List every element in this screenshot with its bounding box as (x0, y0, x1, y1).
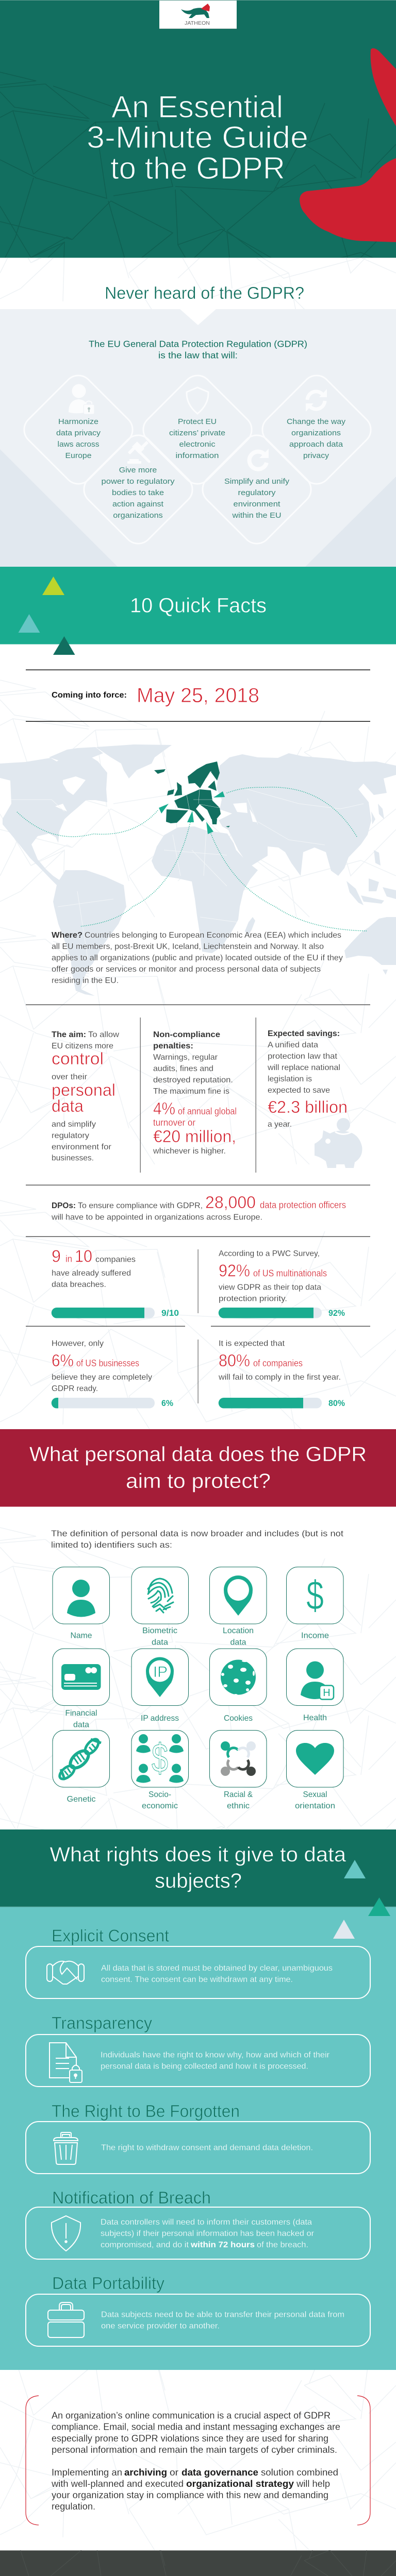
column: the aim: control (52, 1049, 104, 1068)
callout: compliance note: personal information and remain the main targets of cyber criminals. (52, 2445, 337, 2455)
bar (219, 1398, 345, 1409)
stat: 92 percent: According to a PWC Survey, (219, 1249, 320, 1258)
bar: 80% (328, 1398, 345, 1408)
diamond: harmonize: Harmonize (58, 417, 98, 426)
callout: compliance note: solution combined (261, 2467, 338, 2478)
diamond: protect: Protect EU (178, 417, 217, 426)
column: non-compliance penalties: €20 million, (153, 1127, 236, 1146)
text: where: Where? (52, 931, 82, 940)
stat: 92 percent (219, 1249, 345, 1318)
panel: what is the GDPR (0, 309, 396, 567)
callout: compliance note: your organization stay in compliance with this new and demanding (52, 2490, 328, 2500)
diamond: simplify: regulatory (238, 488, 276, 497)
right: explicit consent: Explicit Consent (52, 1926, 169, 1945)
column: expected savings (267, 1029, 348, 1129)
title: to the GDPR (110, 151, 285, 185)
stat: 6 percent: of US businesses (76, 1358, 139, 1368)
callout: compliance note: archiving (124, 2467, 167, 2478)
column: expected savings: legislation is (268, 1075, 312, 1083)
card: location data: Location (223, 1626, 254, 1635)
card: location data (209, 1567, 267, 1647)
banner: rights heading: subjects? (155, 1870, 242, 1892)
column: expected savings: €2.3 billion (268, 1097, 348, 1116)
bar: 92% (328, 1308, 345, 1318)
panel: rights (0, 1829, 396, 2370)
right: notification of breach: Notification of Breach (52, 2188, 211, 2207)
right: explicit consent: All data that is stored must be obtained by clear, unambiguous (101, 1964, 333, 1973)
callout: compliance note: especially prone to GDPR violations since they are used for sharing (52, 2433, 328, 2444)
card: location data: data (230, 1638, 246, 1647)
banner: rights heading: What rights does it give to data (50, 1843, 346, 1866)
column: non-compliance penalties: turnover or (153, 1117, 195, 1128)
stat: 6 percent: GDPR ready. (52, 1384, 98, 1393)
card: biometric data: data (152, 1638, 168, 1647)
right: notification of breach: of the breach. (257, 2241, 308, 2249)
title (87, 90, 308, 185)
column: the aim: environment for (52, 1143, 112, 1151)
logo: JATHEON (185, 21, 210, 26)
column: non-compliance penalties: destroyed reputation. (153, 1076, 233, 1084)
column: the aim: To allow (88, 1030, 119, 1039)
callout: compliance note: or (170, 2467, 178, 2478)
icon: reload (250, 449, 269, 469)
column: non-compliance penalties: The maximum fine is (153, 1087, 229, 1096)
icon: briefcase (48, 2302, 84, 2337)
title: An Essential (111, 90, 283, 124)
icon: warning shield (52, 2216, 80, 2251)
card: IP address: IP (153, 1664, 168, 1681)
column: expected savings: A unified data (268, 1041, 318, 1049)
stat: 80 percent: of companies (253, 1358, 303, 1368)
right: notification of breach (26, 2188, 370, 2259)
logo (159, 1, 237, 29)
right: to be forgotten: The right to withdraw consent and demand data deletion. (101, 2143, 313, 2153)
card: income: $ (306, 1572, 324, 1618)
heading: 10 Quick Facts (130, 595, 267, 617)
diamond: harmonize: laws across (58, 440, 99, 449)
diamond: simplify: within the EU (232, 511, 282, 520)
panel: personal data banner: aim to protect? (126, 1470, 271, 1493)
stat: 9 in 10 (52, 1247, 179, 1318)
banner: rights heading (0, 1829, 396, 1907)
column: the aim: businesses. (52, 1154, 94, 1162)
card: income: Income (301, 1631, 329, 1640)
bar (52, 1308, 179, 1318)
card: health: Health (303, 1714, 327, 1722)
card: IP address: IP address (141, 1714, 179, 1723)
icon: shield (187, 387, 208, 414)
right: explicit consent (26, 1926, 370, 1998)
card: genetic: Genetic (67, 1795, 96, 1804)
callout: compliance note: compliance. Email, social media and instant messaging exchanges are (52, 2421, 340, 2432)
column: non-compliance penalties (153, 1030, 237, 1156)
column: expected savings: protection law that (268, 1052, 338, 1061)
diamond: protect: electronic (179, 440, 216, 449)
diamond: simplify (196, 429, 317, 550)
diamond: regulatory power (78, 429, 199, 550)
diamond: change: organizations (291, 429, 341, 437)
text: where: all EU members, post-Brexit UK, Iceland, Liechtenstein and Norway. It also (52, 942, 324, 951)
fact: coming into force: Coming into force: (52, 691, 127, 700)
column: expected savings: expected to save (268, 1086, 330, 1095)
card: racial and ethnic: ethnic (227, 1802, 250, 1810)
chart: world map with Europe highlighted (0, 744, 396, 996)
card: socio-economic: Socio- (148, 1790, 171, 1799)
stat: 80 percent (218, 1340, 345, 1409)
card: health: H (323, 1687, 331, 1699)
icon: sync arrows (306, 389, 327, 412)
column: non-compliance penalties: penalties: (153, 1042, 193, 1050)
divider (26, 1236, 370, 1237)
card: socio-economic (131, 1730, 189, 1810)
right: data portability: Data subjects need to be able to transfer their personal data from (101, 2310, 344, 2319)
intro text: is the law that will: (158, 350, 238, 361)
column: the aim: and simplify (52, 1120, 96, 1129)
text: definition: limited to) identifiers such as: (51, 1540, 172, 1550)
column: the aim: over their (52, 1073, 88, 1081)
card: sexual orientation: orientation (295, 1802, 335, 1810)
stat: 92 percent: of US multinationals (253, 1268, 327, 1279)
card: biometric data: Biometric (142, 1626, 177, 1635)
fact: DPOs (51, 1193, 346, 1222)
stat: 80 percent: It is expected that (219, 1340, 285, 1348)
diamond: simplify: Simplify and unify (224, 477, 290, 486)
right: notification of breach: within 72 hours (190, 2241, 255, 2249)
diamond: change: privacy (303, 451, 329, 460)
text: where: residing in the EU. (52, 976, 119, 985)
fact: DPOs: will have to be appointed in organizations across Europe. (51, 1213, 262, 1222)
right: transparency: Individuals have the right to know why, how and which of their (101, 2050, 330, 2060)
card: racial and ethnic (209, 1730, 267, 1810)
diamond: regulatory power: organizations (113, 511, 163, 520)
card: IP address (131, 1649, 189, 1723)
bar: 6% (161, 1398, 173, 1408)
right: transparency: Transparency (52, 2013, 152, 2032)
icon: gavel (127, 441, 151, 464)
column: non-compliance penalties: of annual global (178, 1106, 237, 1116)
stat: 9 in 10: in (65, 1254, 72, 1264)
world continents (0, 744, 396, 996)
callout: compliance note: organizational strategy (186, 2479, 294, 2489)
stat: 9 in 10: data breaches. (52, 1280, 106, 1289)
right: notification of breach: compromised, and do it (101, 2241, 189, 2249)
callout: compliance note (26, 2396, 370, 2525)
bar (52, 1398, 173, 1409)
stat: 92 percent: protection priority. (219, 1294, 287, 1303)
card: sexual orientation (287, 1730, 343, 1810)
diamond: regulatory power: Give more (119, 466, 157, 474)
right: notification of breach: subjects) if their personal information has been hacked or (101, 2229, 315, 2238)
diamond: change (256, 369, 377, 490)
diamond: regulatory power: action against (112, 500, 164, 509)
diamond: protect: citizens’ private (169, 429, 225, 437)
heading: never heard: Never heard of the GDPR? (105, 283, 304, 302)
column: the aim (52, 1030, 119, 1162)
diamond: harmonize (18, 369, 139, 490)
inland water and borders (55, 776, 257, 858)
stat: 6 percent: 6% (52, 1351, 74, 1370)
column: the aim: data (52, 1096, 84, 1115)
icon: person with lock (69, 384, 94, 414)
card: financial data: Financial (65, 1709, 97, 1718)
card: socio-economic: $ (152, 1735, 168, 1781)
fact: DPOs: data protection officers (260, 1200, 346, 1210)
intro text (89, 339, 307, 361)
callout: compliance note: with well-planned and executed (51, 2479, 184, 2489)
right: explicit consent: consent. The consent can be withdrawn at any time. (101, 1975, 293, 1984)
stat: 9 in 10: 9 (52, 1247, 61, 1265)
right: to be forgotten (26, 2102, 370, 2174)
fact: coming into force: May 25, 2018 (137, 684, 259, 707)
diamond: simplify: environment (233, 500, 280, 509)
column: the aim: personal (52, 1080, 116, 1099)
bar (219, 1308, 345, 1318)
card: financial data (53, 1649, 109, 1729)
fact: DPOs: To ensure compliance with GDPR, (78, 1201, 203, 1210)
callout: compliance note: Implementing an (52, 2467, 122, 2478)
card: sexual orientation: Sexual (303, 1790, 327, 1799)
panel: about Jatheon (0, 2550, 396, 2576)
card: name: Name (70, 1631, 92, 1640)
callout: compliance note: regulation. (52, 2501, 95, 2512)
panel: header (0, 0, 396, 258)
fact: DPOs: 28,000 (205, 1193, 256, 1212)
right: to be forgotten: The Right to Be Forgotten (52, 2102, 240, 2121)
column: non-compliance penalties: 4% (153, 1099, 175, 1118)
stat: 9 in 10: 10 (75, 1247, 92, 1265)
icon grid (53, 1567, 343, 1810)
column: expected savings: will replace national (267, 1063, 340, 1072)
panel: personal data banner (0, 1429, 396, 1506)
column: the aim: regulatory (52, 1131, 89, 1140)
icon: piggy bank (315, 1118, 362, 1168)
column: non-compliance penalties: audits, fines and (153, 1064, 213, 1073)
triangles (333, 1860, 390, 1939)
text: where: offer goods or services or monitor and process personal data of subjects (52, 965, 321, 974)
stat: 6 percent: believe they are completely (52, 1373, 152, 1382)
card: socio-economic: economic (142, 1802, 178, 1810)
diamond: protect (137, 369, 258, 490)
column: non-compliance penalties: Non-compliance (153, 1030, 220, 1039)
panel: personal data banner: What personal data does the GDPR (29, 1443, 367, 1466)
right: data portability (26, 2274, 370, 2346)
column: expected savings: Expected savings: (268, 1029, 340, 1038)
stat: 92 percent: view GDPR as their top data (219, 1283, 321, 1292)
diamond: harmonize: data privacy (56, 429, 101, 437)
card: income (287, 1567, 343, 1640)
intro text: The EU General Data Protection Regulation (GDPR) (89, 339, 307, 349)
icon: locked document (50, 2043, 82, 2082)
diamond: change: Change the way (287, 417, 346, 426)
column: expected savings: a year. (268, 1120, 292, 1129)
card: genetic (53, 1730, 109, 1804)
right: data portability: one service provider to another. (101, 2321, 220, 2331)
callout: compliance note: will help (296, 2479, 330, 2489)
callout: compliance note: data governance (182, 2467, 258, 2478)
arrows: dotted routes (17, 787, 368, 931)
stat: 6 percent: However, only (52, 1340, 104, 1348)
icon: handshake (47, 1961, 84, 1984)
fact: coming into force (26, 670, 370, 722)
stat: 9 in 10: have already suffered (52, 1269, 131, 1278)
diamond: protect: information (175, 451, 219, 460)
stat: 6 percent (52, 1340, 173, 1409)
stat: 80 percent: will fail to comply in the first year. (218, 1373, 341, 1382)
right: transparency: personal data is being collected and how it is processed. (101, 2062, 308, 2071)
text: where: applies to all organizations (public and private) located outside of the EU if they (52, 954, 343, 962)
card: racial and ethnic: Racial & (224, 1790, 253, 1799)
diamond: regulatory power: power to regulatory (101, 477, 175, 486)
column: non-compliance penalties: whichever is higher. (153, 1147, 226, 1156)
right: notification of breach: Data controllers will need to inform their customers (data (101, 2218, 312, 2227)
icon: trash can (54, 2132, 78, 2164)
card: cookies: Cookies (224, 1714, 253, 1723)
text: where (52, 931, 343, 985)
callout: compliance note: An organization’s online communication is a crucial aspect of GDPR (52, 2410, 331, 2420)
card: name (53, 1567, 109, 1640)
stat: 92 percent: 92% (219, 1261, 250, 1280)
triangles (19, 577, 75, 655)
text: definition: The definition of personal data is now broader and includes (but is not (51, 1529, 343, 1538)
stat: 9 in 10: companies (95, 1255, 136, 1264)
EU highlighted (154, 761, 230, 827)
diamond: change: approach data (289, 440, 343, 449)
diamond: harmonize: Europe (65, 451, 92, 460)
column: the aim: The aim: (52, 1030, 86, 1039)
text: definition (51, 1529, 343, 1550)
column: the aim: EU citizens more (52, 1042, 113, 1050)
card: health (287, 1649, 343, 1722)
card: biometric data (131, 1567, 189, 1647)
red fox ear graphic (300, 48, 396, 242)
right: data portability: Data Portability (52, 2274, 164, 2293)
panel: 10 quick facts banner (0, 567, 396, 655)
card: cookies (209, 1649, 267, 1723)
right: transparency (26, 2013, 370, 2087)
text: where: Countries belonging to European Economic Area (EEA) which includes (85, 931, 341, 940)
fact: DPOs: DPOs: (52, 1201, 76, 1210)
title: 3-Minute Guide (87, 120, 308, 155)
column: non-compliance penalties: Warnings, regular (153, 1053, 218, 1062)
card: financial data: data (73, 1721, 89, 1729)
diamond: regulatory power: bodies to take (112, 488, 164, 497)
bar: 9/10 (161, 1308, 179, 1318)
stat: 80 percent: 80% (219, 1351, 250, 1370)
